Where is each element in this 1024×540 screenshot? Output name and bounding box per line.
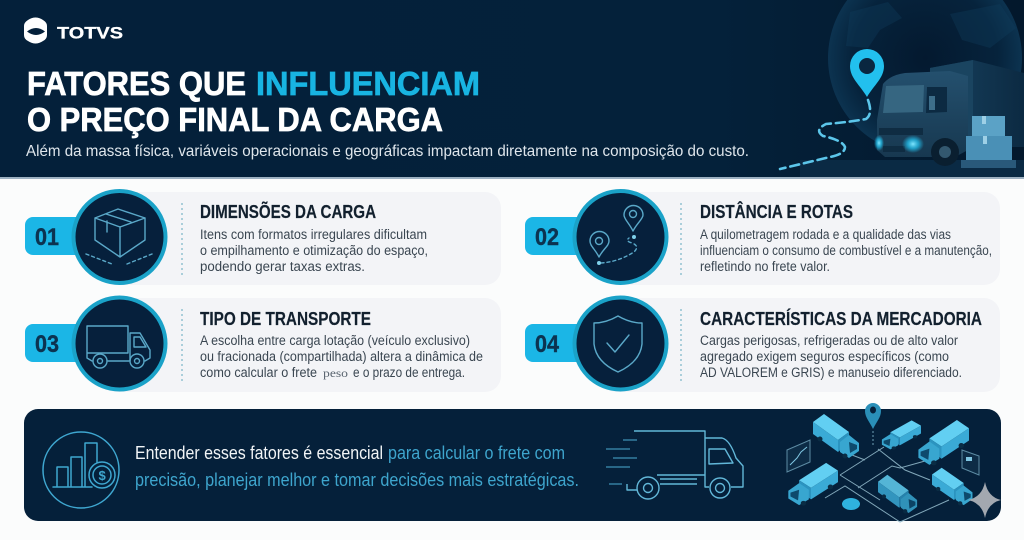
text: dimensões: o empilhamento e otimização do espaço, <box>200 243 428 259</box>
text: tipo de transporte: A escolha entre carga lotação (veículo exclusivo) <box>200 333 470 349</box>
icon: chart card <box>787 440 810 472</box>
text: tipo de transporte: peso <box>323 366 348 380</box>
network lines <box>825 447 949 522</box>
logo: TOTVS <box>24 18 123 44</box>
number tab 04 <box>525 324 585 362</box>
illustration: truck <box>874 60 1024 168</box>
divider dashes <box>181 309 183 381</box>
icon: truck outline <box>74 298 166 390</box>
text: distância: A quilometragem rodada e a qualidade das vias <box>700 227 951 243</box>
icon: location pin <box>850 49 884 97</box>
divider dashes <box>181 203 183 275</box>
text: características: Cargas perigosas, refrigeradas ou de alto valor <box>700 333 958 349</box>
number tab 03: 03 <box>35 331 59 358</box>
text: conclusion: para calcular o frete com <box>388 443 565 463</box>
illustration: globe <box>800 0 1024 177</box>
heading: dimensões da carga: DIMENSÕES DA CARGA <box>200 201 376 222</box>
panel: card 03 tipo de transporte <box>25 298 501 392</box>
panel: card 02 distância e rotas <box>525 191 1000 285</box>
text: tipo de transporte: e o prazo de entrega. <box>353 365 465 381</box>
icon: blue pin <box>865 403 881 447</box>
icon: moving truck outline <box>606 431 743 499</box>
text: tipo de transporte <box>200 333 483 381</box>
title: FATORES QUE <box>27 65 246 102</box>
iso truck 2 <box>882 420 921 450</box>
subtitle: Além da massa física, variáveis operacionais e geográficas impactam diretamente na composição do custo. <box>26 143 749 160</box>
number tab 02 <box>525 217 585 255</box>
title: O PREÇO FINAL DA CARGA <box>27 101 443 138</box>
text: características: AD VALOREM e GRIS) e manuseio diferenciado. <box>700 365 962 381</box>
icon: chart with coin: $ <box>98 468 106 483</box>
divider dashes <box>680 309 682 381</box>
diagram: truck network <box>787 403 979 522</box>
text: conclusion <box>135 443 579 490</box>
iso truck 3 <box>918 420 969 465</box>
text: distância <box>700 227 992 275</box>
panel: card 01 dimensões da carga <box>25 191 501 285</box>
icon: sparkle <box>968 482 1001 518</box>
text: características: agregado exigem seguros específicos (como <box>700 349 949 365</box>
text: distância: refletindo no frete valor. <box>700 259 830 275</box>
icon: box with arrows <box>74 191 166 283</box>
icon: pie chart <box>842 498 860 510</box>
icon: two pins route <box>574 191 666 283</box>
title <box>27 65 480 138</box>
number tab 03 <box>25 324 85 362</box>
panel: header <box>0 0 1024 179</box>
iso truck 4 <box>788 463 838 506</box>
icon: logo lens <box>27 28 45 35</box>
illustration: route line <box>780 100 870 169</box>
icon: chart with coin <box>43 432 119 508</box>
iso truck 1 <box>813 414 859 458</box>
number tab 01 <box>25 217 85 255</box>
text: conclusion: precisão, planejar melhor e tomar decisões mais estratégicas. <box>135 470 579 490</box>
text: dimensões: Itens com formatos irregulares dificultam <box>200 227 427 243</box>
icon: shield check <box>574 298 666 390</box>
iso truck 6 <box>932 468 972 506</box>
title: INFLUENCIAM <box>256 65 480 102</box>
panel: card 04 características da mercadoria <box>525 298 1000 392</box>
icon: logo mark <box>24 18 47 44</box>
heading: distância e rotas: DISTÂNCIA E ROTAS <box>700 201 853 222</box>
text: conclusion: Entender esses fatores é essencial <box>135 443 383 463</box>
number tab 01: 01 <box>35 224 59 251</box>
text: dimensões: podendo gerar taxas extras. <box>200 259 365 275</box>
heading: tipo de transporte: TIPO DE TRANSPORTE <box>200 308 371 329</box>
number tab 04: 04 <box>535 331 560 358</box>
iso truck 5 <box>878 475 917 513</box>
icon: info card <box>962 450 979 475</box>
logo wordmark: TOTVS <box>57 24 123 42</box>
text: tipo de transporte: ou fracionada (compartilhada) altera a dinâmica de <box>200 349 483 365</box>
panel: bottom banner <box>24 403 1001 522</box>
number tab 02: 02 <box>535 224 559 251</box>
text: características <box>700 333 962 381</box>
text: tipo de transporte: como calcular o frete <box>200 365 317 381</box>
divider dashes <box>680 203 682 275</box>
text: dimensões <box>200 227 428 275</box>
